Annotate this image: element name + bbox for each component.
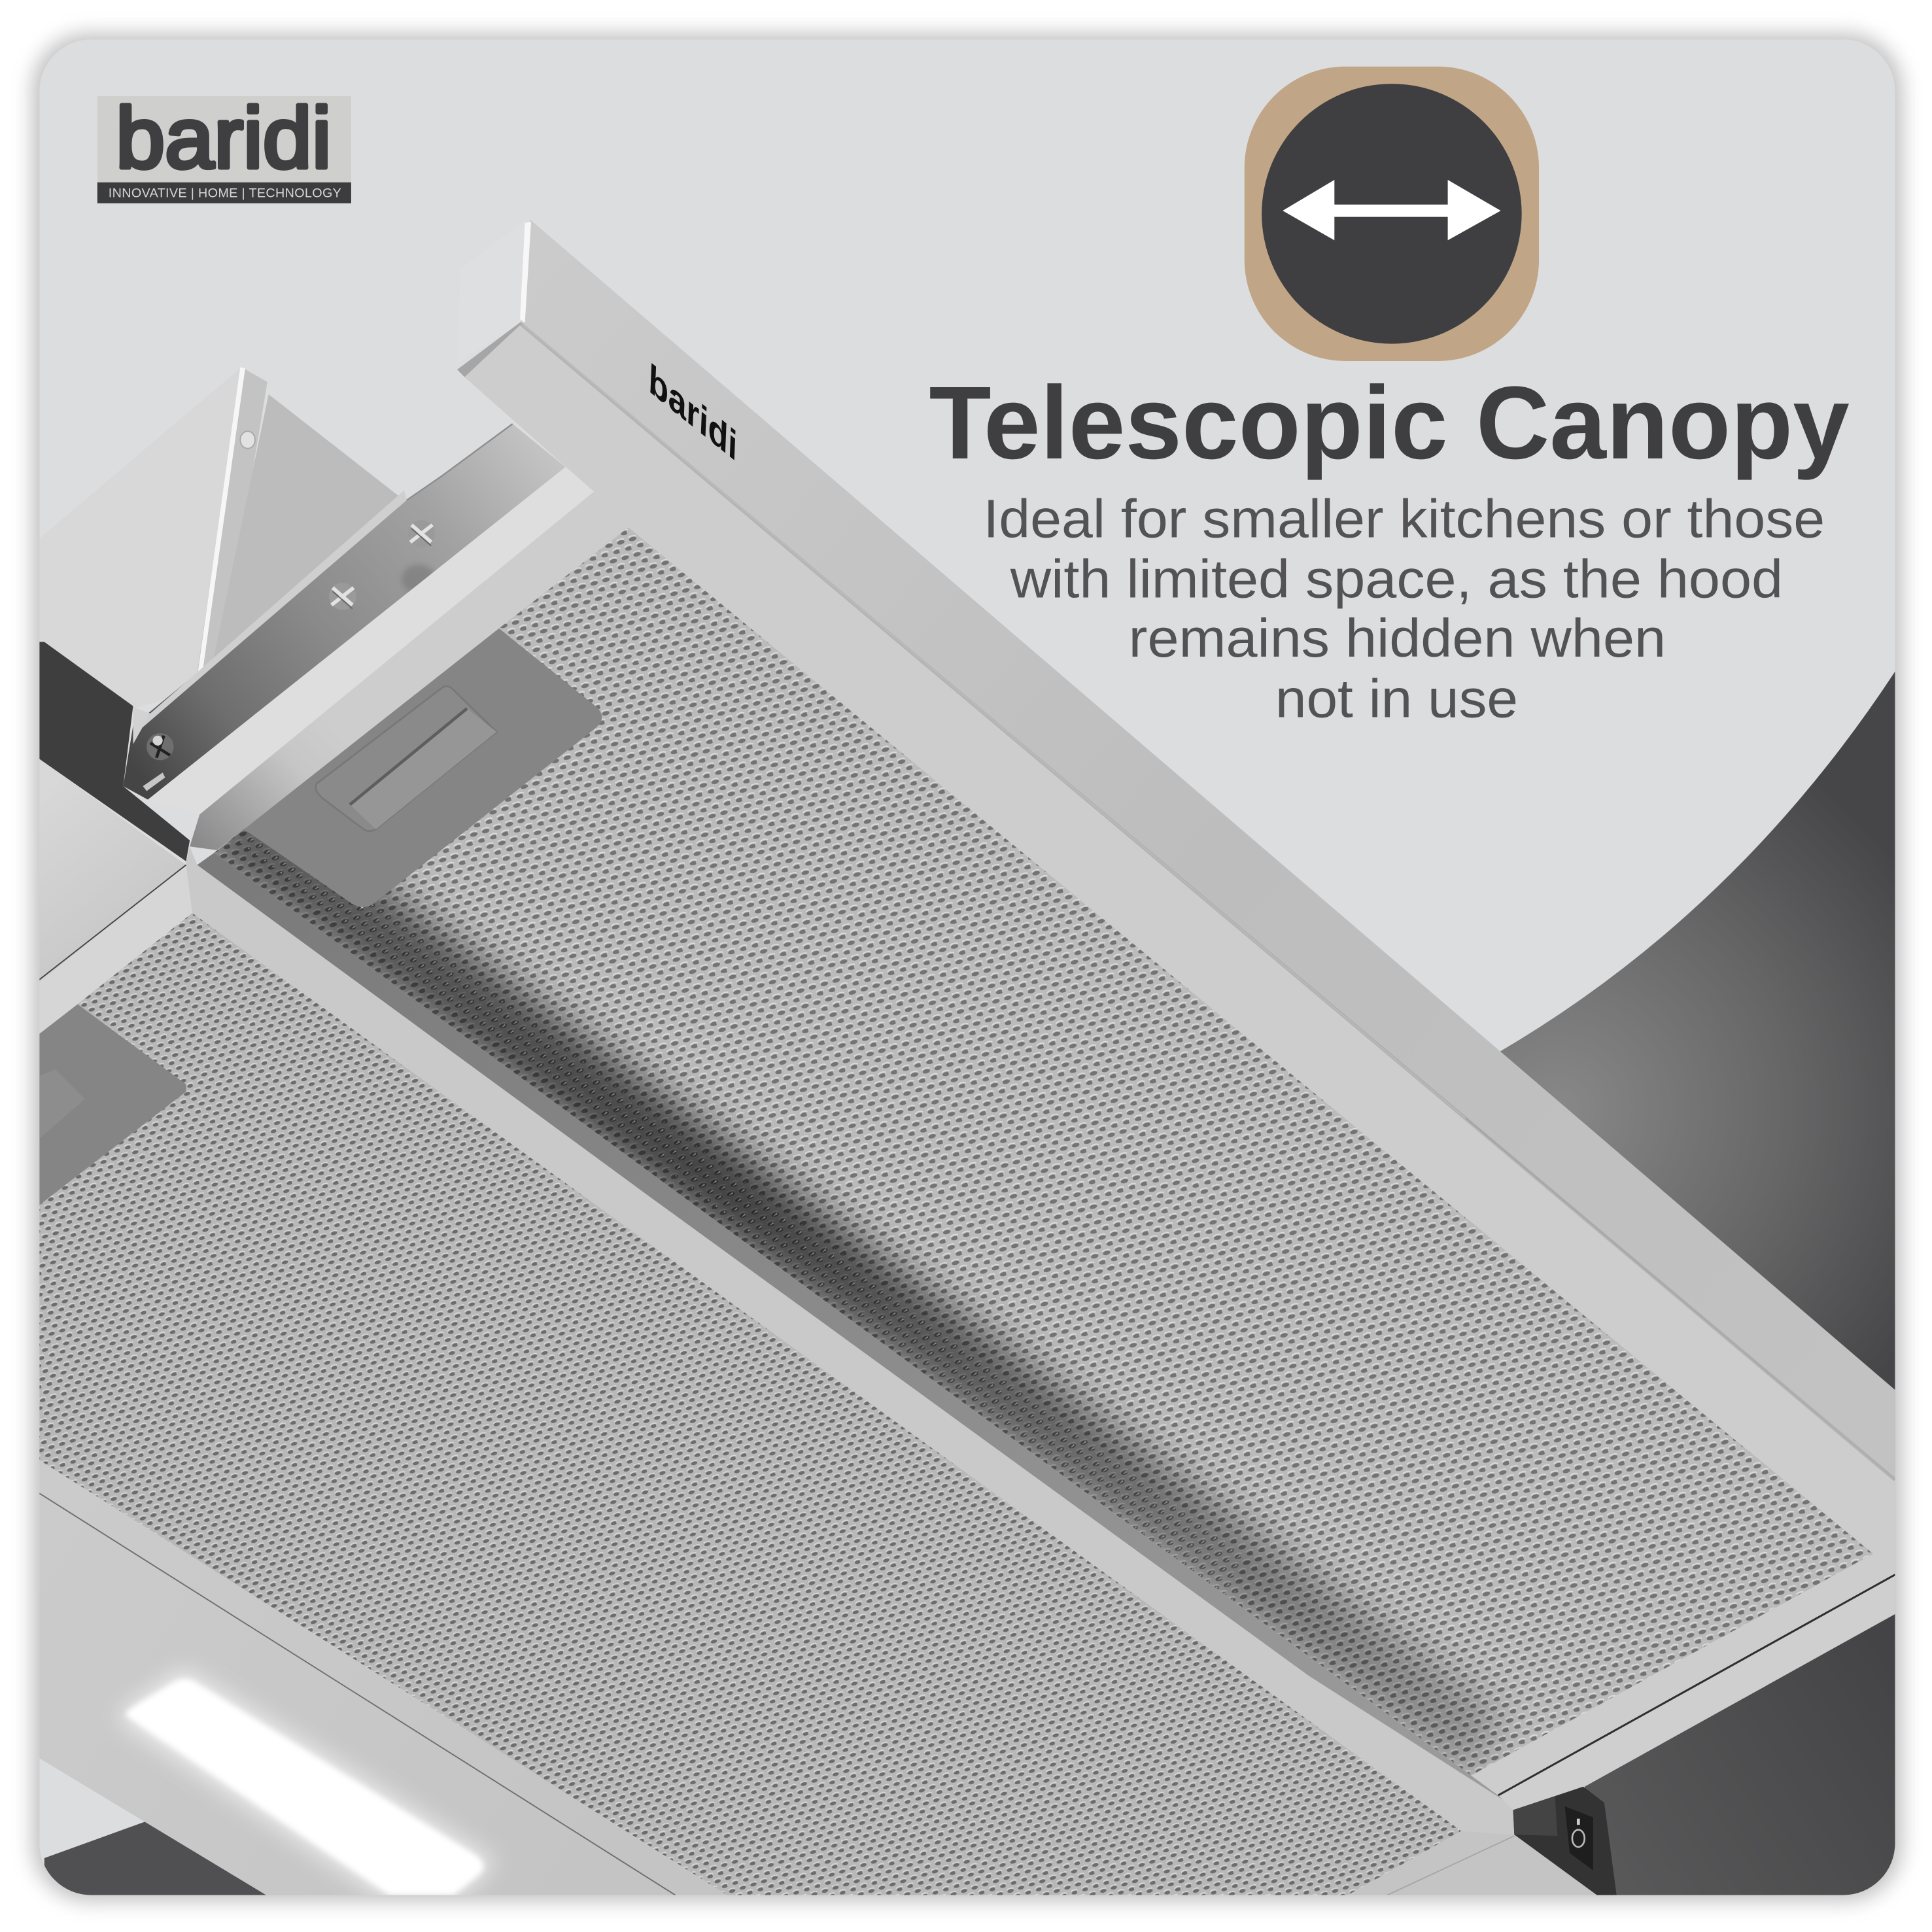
left frame strip <box>39 865 192 1034</box>
bracket light fold <box>142 491 407 728</box>
description text: remains hidden when <box>1129 608 1666 668</box>
handle tab <box>350 708 496 829</box>
duct folded strip <box>195 367 267 690</box>
panel seam right <box>1387 1836 1514 1895</box>
description text: with limited space, as the hood <box>1010 549 1783 610</box>
icon arrow <box>1283 180 1501 240</box>
bracket clip <box>143 772 165 791</box>
frame side band <box>190 492 629 850</box>
lower bracket screw <box>147 733 174 760</box>
fascia end cap <box>457 219 526 364</box>
icon disc <box>1262 84 1522 344</box>
frame bright band <box>148 467 594 814</box>
fascia highlight <box>520 222 531 323</box>
centre frame strip <box>185 846 1514 1835</box>
switch housing <box>1513 1787 1617 1895</box>
panel seam <box>39 1493 675 1895</box>
bracket stain <box>402 564 436 594</box>
background dark lower right <box>1585 1614 1895 1895</box>
lower panel <box>39 1460 1597 1895</box>
fascia upper face <box>521 219 1895 1480</box>
filter one shadow band <box>197 789 1506 1783</box>
description text <box>983 488 1825 729</box>
handle groove <box>350 708 467 804</box>
frame fold shade <box>521 324 1895 1480</box>
title: Telescopic Canopy <box>929 365 1850 481</box>
band under filter one <box>197 853 1513 1806</box>
logo tagline: INNOVATIVE | HOME | TECHNOLOGY <box>109 186 341 200</box>
screw <box>329 583 356 610</box>
dark side bracket <box>39 642 190 861</box>
logo plate <box>97 96 351 182</box>
fascia brand mark: baridi <box>647 354 738 471</box>
filter frame <box>464 324 1895 1795</box>
logo tagline strip <box>97 182 351 203</box>
description text: Ideal for smaller kitchens or those <box>983 488 1825 549</box>
LED light <box>116 1670 495 1897</box>
left body block <box>39 759 186 982</box>
metal bracket with screws <box>123 424 566 800</box>
front fascia bar <box>457 219 1895 1480</box>
duct housing <box>198 368 398 672</box>
rocker switch <box>1565 1806 1593 1871</box>
background dark lower left <box>44 1821 266 1895</box>
filter two handle plate <box>39 1004 186 1205</box>
description text: not in use <box>1275 668 1518 729</box>
logo <box>97 90 351 203</box>
handle recess <box>39 1069 85 1139</box>
duct rivet <box>240 431 255 449</box>
background dark curved shape <box>1405 672 1895 1848</box>
lower frame rail <box>1498 1575 1895 1810</box>
duct light side <box>39 367 241 708</box>
fascia lower edge <box>457 322 524 377</box>
filter one handle plate <box>244 629 602 907</box>
filter two mesh <box>39 913 1461 1895</box>
icon tile <box>1245 67 1539 361</box>
logo wordmark: baridi <box>116 90 332 186</box>
filter one mesh <box>197 527 1873 1783</box>
icon: telescopic double arrow <box>1245 67 1539 361</box>
duct grey side <box>207 394 419 727</box>
screw <box>408 520 435 547</box>
handle recess <box>316 686 496 831</box>
